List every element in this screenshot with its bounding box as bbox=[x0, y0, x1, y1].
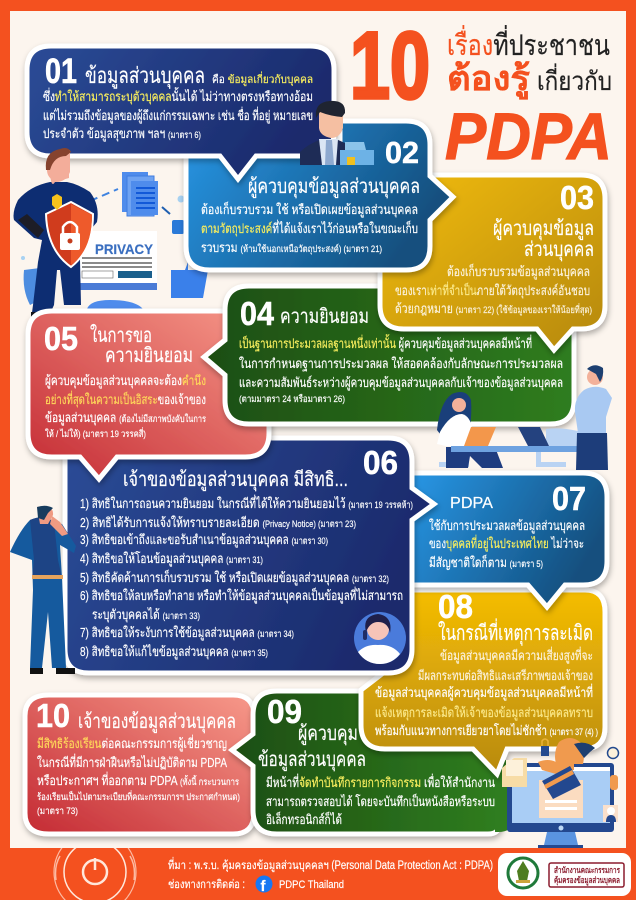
icon: facebook bbox=[256, 876, 272, 895]
panel 07 bbox=[410, 473, 607, 607]
heading 05: ในการขอ bbox=[90, 324, 152, 347]
number 03: 03 bbox=[560, 179, 594, 216]
panel 10 bbox=[25, 695, 254, 834]
bubble 07 bbox=[410, 473, 607, 607]
body text 02: รวบรวม (ห้ามใช้นอกเหนือวัตถุประสงค์) (มาตรา 21) bbox=[201, 240, 382, 255]
rights list: 4) สิทธิขอให้โอนข้อมูลส่วนบุคคล (มาตรา 31) bbox=[80, 551, 263, 567]
body text 08: ข้อมูลส่วนบุคคลมีความเสี่ยงสูงที่จะ bbox=[440, 647, 593, 664]
title: PDPA bbox=[445, 99, 612, 173]
bubble 10 bbox=[25, 695, 254, 834]
rights list: 6) สิทธิขอให้ลบหรือทำลาย หรือทำให้ข้อมูลส่วนบุคคลเป็นข้อมูลที่ไม่สามารถ bbox=[80, 586, 403, 604]
panel 05 bbox=[28, 311, 269, 479]
body text 07: ใช้กับการประมวลผลข้อมูลส่วนบุคคล bbox=[429, 518, 585, 534]
title: เกี่ยวกับ bbox=[537, 63, 612, 96]
rights list: 1) สิทธิในการถอนความยินยอม ในกรณีที่ได้ให้ความยินยอมไว้ (มาตรา 19 วรรคห้า) bbox=[80, 495, 413, 511]
body text 10: ในกรณีที่มีการฝ่าฝืนหรือไม่ปฏิบัติตาม PDPA bbox=[37, 754, 227, 770]
body text 02: ต้องเก็บรวบรวม ใช้ หรือเปิดเผยข้อมูลส่วนบุคคล bbox=[201, 200, 418, 218]
body text 05: ให้ / ไม่ให้) (มาตรา 19 วรรคสี่) bbox=[45, 427, 146, 440]
panel 09 bbox=[232, 691, 512, 834]
body text 03: ด้วยกฎหมาย (มาตรา 22) (ใช้ข้อมูลของเราให้น้อยที่สุด) bbox=[395, 301, 592, 316]
illustration: businessman and locked folder bbox=[300, 101, 374, 165]
number 02: 02 bbox=[385, 135, 419, 170]
heading 09: 09 bbox=[267, 693, 302, 730]
heading text 10: เจ้าของข้อมูลส่วนบุคคล bbox=[78, 711, 236, 734]
body text 05: อย่างที่สุดในความเป็นอิสระของเจ้าของ bbox=[45, 390, 206, 408]
bubble 02 bbox=[186, 121, 453, 270]
bubble 06 bbox=[65, 438, 434, 673]
number 07: 07 bbox=[552, 480, 586, 517]
bubble 01 bbox=[27, 46, 334, 179]
body text 07: ของบุคคลที่อยู่ในประเทศไทย ไม่ว่าจะ bbox=[429, 535, 584, 552]
body text 05: ข้อมูลส่วนบุคคล (ต้องไม่มีสภาพบังคับในการ bbox=[45, 410, 206, 426]
heading text 09: ข้อมูลส่วนบุคคล bbox=[258, 749, 366, 772]
heading 03 bbox=[493, 218, 594, 262]
number 05: 05 bbox=[44, 320, 78, 357]
title: เรื่องที่ประชาชน bbox=[447, 25, 610, 62]
panel 06 bbox=[65, 438, 434, 673]
rights list: 3) สิทธิขอเข้าถึงและขอรับสำเนาข้อมูลส่วนบุคคล (มาตรา 30) bbox=[80, 532, 328, 548]
bubble 04 bbox=[204, 286, 574, 424]
heading text 09: ผู้ควบคุม bbox=[298, 723, 358, 746]
body text 07 bbox=[429, 518, 585, 570]
illustration: computer and card bbox=[502, 738, 618, 848]
body text 09: สามารถตรวจสอบได้ โดยจะบันทึกเป็นหนังสือหรือระบบ bbox=[266, 792, 495, 809]
rights list bbox=[80, 495, 413, 660]
rights list: 5) สิทธิคัดค้านการเก็บรวบรวม ใช้ หรือเปิดเผยข้อมูลส่วนบุคคล (มาตรา 32) bbox=[80, 568, 389, 586]
body text 04: เป็นฐานการประมวลผลฐานหนึ่งเท่านั้น ผู้ควบคุมข้อมูลส่วนบุคคลมีหน้าที่ bbox=[239, 334, 532, 352]
panel 03 bbox=[380, 175, 605, 350]
body text 02: ตามวัตถุประสงค์ที่ได้แจ้งเราไว้ก่อนหรือในขณะเก็บ bbox=[201, 219, 418, 237]
footer facebook name: PDPC Thailand bbox=[279, 879, 344, 891]
body text 03: ของเราเท่าที่จำเป็นภายใต้วัตถุประสงค์อันชอบ bbox=[395, 281, 590, 299]
illustration: man looking up bbox=[10, 506, 76, 674]
body text 02 bbox=[201, 200, 418, 255]
body text 10: มีสิทธิร้องเรียนต่อคณะกรรมการผู้เชี่ยวชาญ bbox=[37, 735, 227, 752]
body text 01 bbox=[43, 87, 313, 142]
body text 10 bbox=[37, 735, 240, 817]
heading text 09 bbox=[258, 723, 366, 772]
body text 10: (มาตรา 73) bbox=[37, 806, 78, 817]
heading 10: 10 bbox=[36, 697, 70, 734]
body text 09: อิเล็กทรอนิกส์ก็ได้ bbox=[266, 810, 342, 827]
body text 08 bbox=[375, 647, 598, 738]
icon: facebook: f bbox=[260, 878, 266, 895]
body text 01: ซึ่งทำให้สามารถระบุตัวบุคคลนั้นได้ ไม่ว่าทางตรงหรือทางอ้อม bbox=[43, 87, 313, 105]
heading 05: ความยินยอม bbox=[105, 345, 193, 367]
bubble 03 bbox=[380, 175, 605, 350]
body text 08: พร้อมกับแนวทางการเยียวยาโดยไม่ชักช้า (มาตรา 37 (4) ) bbox=[375, 723, 598, 738]
panel 01 bbox=[27, 46, 334, 179]
body text 09 bbox=[266, 774, 495, 827]
bubble 09 bbox=[232, 691, 500, 834]
logo panel bbox=[498, 853, 631, 896]
body text 09: มีหน้าที่จัดทำบันทึกรายการกิจกรรม เพื่อให้สำนักงาน bbox=[266, 774, 495, 790]
intro text 01: คือ ข้อมูลเกี่ยวกับบุคคล bbox=[212, 71, 313, 86]
body text 10: ร้องเรียนเป็นไปตามระเบียบที่คณะกรรมการฯ ประกาศกำหนด) bbox=[37, 790, 240, 803]
body text 05: ผู้ควบคุมข้อมูลส่วนบุคคลจะต้องคำนึง bbox=[45, 373, 206, 389]
body text 04: (ตามมาตรา 24 หรือมาตรา 26) bbox=[239, 394, 345, 405]
heading 01: ข้อมูลส่วนบุคคล bbox=[85, 63, 205, 89]
heading 02: ผู้ควบคุมข้อมูลส่วนบุคคล bbox=[248, 176, 420, 199]
body text 03: ต้องเก็บรวบรวมข้อมูลส่วนบุคคล bbox=[447, 262, 590, 280]
body text 10: หรือประกาศฯ ที่ออกตาม PDPA (ทั้งนี้ กระบวนการ bbox=[37, 772, 239, 788]
footer source text: ที่มา : พ.ร.บ. คุ้มครองข้อมูลส่วนบุคคลฯ (Personal Data Protection Act : PDPA) bbox=[168, 857, 493, 872]
heading 04: ความยินยอม bbox=[280, 306, 369, 328]
title: ต้องรู้ bbox=[447, 60, 531, 100]
body text 01: แต่ไม่รวมถึงข้อมูลของผู้ถึงแก่กรรมเฉพาะ เช่น ชื่อ ที่อยู่ หมายเลข bbox=[43, 107, 313, 124]
icon: footer power button bbox=[53, 848, 137, 900]
agency name bbox=[549, 863, 624, 887]
green bubble right extension bbox=[495, 760, 512, 832]
body text 07: มีสัญชาติใดก็ตาม (มาตรา 5) bbox=[429, 553, 543, 570]
illustration: man holding shield bbox=[14, 158, 98, 328]
illustration: head of man with shield bbox=[46, 148, 71, 182]
heading 06: เจ้าของข้อมูลส่วนบุคคล มีสิทธิ... bbox=[123, 469, 348, 492]
title: 10 bbox=[350, 13, 430, 119]
rights list: 2) สิทธิได้รับการแจ้งให้ทราบรายละเอียด (Privacy Notice) (มาตรา 23) bbox=[80, 515, 356, 530]
rights list: 8) สิทธิขอให้แก้ไขข้อมูลส่วนบุคคล (มาตรา 35) bbox=[80, 644, 268, 660]
heading 03: ส่วนบุคคล bbox=[524, 239, 594, 262]
bubble 05 bbox=[28, 311, 269, 479]
icon: agency seal bbox=[508, 858, 538, 888]
heading 03: ผู้ควบคุมข้อมูล bbox=[493, 218, 594, 241]
body text 05 bbox=[45, 373, 206, 440]
number 06: 06 bbox=[363, 444, 398, 481]
bubble 08 bbox=[361, 590, 605, 774]
panel 04 bbox=[204, 286, 574, 424]
panel 08 bbox=[361, 588, 605, 774]
icon: security shield bbox=[46, 194, 93, 267]
heading 08: 08 bbox=[438, 588, 473, 625]
illustration: privacy documents: PRIVACY bbox=[95, 241, 154, 257]
heading 05 bbox=[90, 324, 193, 367]
rights list: 7) สิทธิขอให้ระงับการใช้ข้อมูลส่วนบุคคล (มาตรา 34) bbox=[80, 625, 294, 641]
number 01: 01 bbox=[45, 52, 77, 91]
body text 04 bbox=[239, 334, 563, 405]
body text 01: ประจำตัว ข้อมูลสุขภาพ ฯลฯ (มาตรา 6) bbox=[43, 126, 201, 142]
footer contact label: ช่องทางการติดต่อ : bbox=[168, 878, 245, 891]
number 04: 04 bbox=[240, 295, 275, 332]
title bbox=[350, 13, 612, 173]
icon: woman on phone bbox=[354, 612, 406, 664]
panel 02 bbox=[186, 121, 453, 270]
illustration: privacy documents bbox=[21, 172, 208, 309]
illustration: woman and man at desk bbox=[437, 365, 612, 470]
body text 04: ในการกำหนดฐานการประมวลผล ให้สอดคล้องกับลักษณะการประมวลผล bbox=[239, 356, 563, 372]
heading 07: PDPA bbox=[450, 495, 493, 512]
rights list: ระบุตัวบุคคลได้ (มาตรา 33) bbox=[92, 607, 200, 623]
body text 03 bbox=[395, 262, 592, 316]
